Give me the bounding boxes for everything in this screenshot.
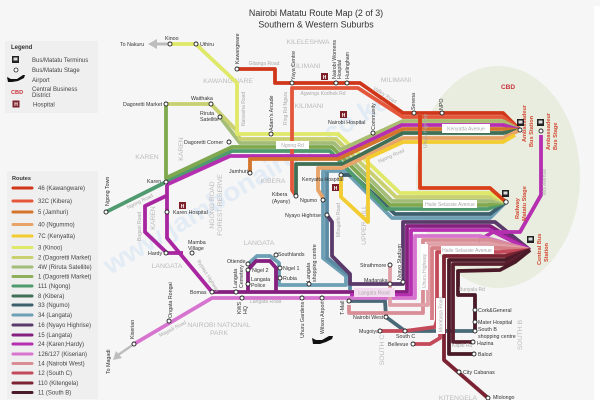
- station labels: Satellite: [200, 117, 219, 123]
- road labels: Valley Road: [372, 86, 398, 105]
- station labels: Ongata Rongai: [168, 282, 174, 318]
- panel: routes key: Routes: [12, 176, 31, 182]
- road labels: Mombasa Road: [438, 296, 444, 332]
- route 33 south: [327, 172, 350, 290]
- road labels: Moi Avenue: [542, 169, 548, 195]
- road labels: Haile Selassie Avenue: [442, 248, 492, 254]
- terminus names: Railway: [515, 197, 521, 219]
- station labels: Balozi: [478, 352, 492, 358]
- station labels: Police: [251, 283, 265, 289]
- station labels: Southlands: [278, 252, 305, 258]
- station labels: Kawangware: [235, 33, 241, 64]
- terminus names: Ambassadeur: [546, 112, 552, 150]
- panel: routes key: 33 (Ngumo): [38, 303, 70, 309]
- station labels: Karen Hospital: [173, 210, 208, 216]
- route Strathmore: [390, 244, 530, 305]
- station labels: Langata: [233, 269, 239, 288]
- station labels: Hardy: [148, 251, 162, 257]
- route 7C: [341, 135, 515, 222]
- terminus names: [515, 104, 559, 265]
- CBD area: [416, 66, 580, 288]
- station labels: shopping centre: [312, 244, 318, 282]
- station labels: Nyayo Highrise: [285, 213, 321, 219]
- station labels: NPO: [439, 99, 445, 110]
- station labels: T-Mall: [340, 301, 346, 315]
- area names: UPPER HILL: [361, 205, 368, 245]
- station labels: Uhuru Gardens: [300, 301, 306, 338]
- panel: routes key: 32C (Kibera): [38, 199, 72, 205]
- route 11 South B: [458, 250, 530, 331]
- panel: legend: Bus/Matatu Stage: [32, 68, 80, 74]
- road labels: Ngong Road: [377, 148, 406, 165]
- station labels: Riruta: [200, 111, 214, 117]
- station labels: Yaya Centre: [291, 51, 297, 80]
- station labels: Community: [371, 103, 377, 130]
- panel: routes key: 8 (Kibera): [38, 294, 64, 300]
- station labels: Hospital: [337, 60, 343, 79]
- panel: legend: CBD: [11, 90, 23, 96]
- panel: legend: [5, 41, 98, 113]
- area names: LANGATA: [152, 263, 183, 270]
- station labels: Hurlingham: [345, 51, 351, 79]
- route 46: [237, 69, 520, 130]
- panel: legend: Central Business: [32, 87, 77, 93]
- route 111: [106, 151, 506, 212]
- route 14 inner: [432, 248, 530, 320]
- hospital icons: H: [334, 186, 338, 192]
- station labels: Serena: [411, 93, 417, 110]
- station labels: South C: [396, 334, 415, 340]
- panel: routes key: 14 (Nairobi West): [38, 362, 85, 368]
- route 1: [166, 104, 506, 205]
- area names: KAREN: [178, 137, 185, 161]
- hospital icons: H: [342, 113, 346, 119]
- station labels: Kenyatta Hospital: [302, 177, 344, 183]
- road labels: Bypass Highway: [195, 259, 220, 294]
- station labels: Waithaka: [191, 96, 213, 102]
- route 15 loop: [248, 261, 276, 291]
- hospital icons: [179, 73, 347, 210]
- station labels: Ngumo: [300, 198, 317, 204]
- station labels: Ngong Town: [105, 177, 111, 206]
- route 110: [444, 250, 530, 398]
- area names: SOUTH B: [517, 319, 524, 350]
- station labels: Madaraka: [364, 278, 388, 284]
- panel: routes key: 34 (Langata): [38, 313, 72, 319]
- station labels: Mater Hospital: [478, 320, 512, 326]
- road labels: Kenyatta Avenue: [447, 126, 485, 132]
- area names: KAWANGWARE: [203, 78, 253, 85]
- station labels: shopping centre: [478, 334, 516, 340]
- route 24 north: [166, 125, 520, 185]
- panel: routes key: 11 (South B): [38, 390, 71, 396]
- road labels: Uhuru Highway: [423, 113, 429, 148]
- panel: legend: Bus/Matatu Terminus: [32, 58, 88, 64]
- terminus names: Central Bus: [537, 234, 543, 265]
- panel: routes key: 111 (Ngong): [38, 284, 70, 290]
- watermark: www.jambonairobi.co.ke: [97, 85, 394, 281]
- road labels: Gitanga Road: [249, 61, 280, 67]
- terminus names: Station: [544, 242, 550, 262]
- panel: routes key: 7C (Kenyatta): [38, 234, 75, 240]
- station labels: Wilson Airport: [320, 301, 326, 334]
- station labels: Rubia: [283, 276, 297, 282]
- station labels: City Cabanas: [463, 370, 495, 376]
- panel: routes key: 1 (Dagoretti Market): [38, 274, 91, 280]
- road labels: Haile Selassie Avenue: [425, 202, 475, 208]
- station labels: Nigel 2: [252, 268, 269, 274]
- station labels: Village: [188, 246, 204, 252]
- station labels: [105, 33, 516, 400]
- area names: MILIMANI: [381, 77, 411, 84]
- area names: SOUTH C: [379, 335, 386, 365]
- title: Nairobi Matatu Route Map (2 of 3): [249, 8, 383, 18]
- station labels: Bellevue: [388, 342, 408, 348]
- station labels: Adam's Arcade: [269, 95, 275, 131]
- route 24: [478, 135, 541, 241]
- area names: NGONG ROAD: [209, 181, 216, 229]
- station labels: Otiende: [227, 259, 246, 265]
- station labels: Dagoretti Market: [123, 102, 163, 108]
- panel: routes key: 24 (Karen;Hardy): [38, 342, 84, 348]
- road labels: Ring Rd Ngara: [283, 92, 289, 125]
- route 3: [170, 44, 506, 202]
- route 126: [134, 236, 530, 344]
- road labels: Langata Road: [250, 299, 282, 305]
- panel: routes key: 126/127 (Kiserian): [38, 352, 87, 358]
- area names: KILELESHWA: [286, 39, 330, 46]
- hospital icons: H: [181, 204, 185, 210]
- route 15: [212, 226, 530, 292]
- route 24 bundle: [350, 230, 530, 295]
- panel: routes key: 12 (South C): [38, 371, 72, 377]
- title: Southern & Western Suburbs: [258, 20, 374, 30]
- area names: KILIMANI: [291, 63, 321, 70]
- station labels: Hazina: [477, 341, 494, 347]
- route 11 Hazina: [453, 250, 530, 342]
- panel: routes key: 46 (Kawangware): [38, 186, 85, 192]
- panel: routes key: [7, 171, 98, 399]
- area names: KAREN: [135, 154, 159, 161]
- road labels: Agwings Kodhek Rd: [300, 91, 346, 97]
- panel: legend: Legend: [11, 45, 33, 51]
- route 34 loop: [248, 256, 279, 264]
- panel: routes key: 2 (Dagoretti Market): [38, 256, 91, 262]
- road labels: Langata Road: [358, 290, 390, 296]
- area names: FOREST RESERVE: [217, 174, 224, 236]
- station labels: Dagoretti Corner: [184, 140, 223, 146]
- route 4W: [220, 117, 506, 202]
- station labels: Nairobi Hospital: [328, 120, 365, 126]
- route 33: [341, 175, 506, 214]
- panel: routes key: 40 (Ngummo): [38, 222, 75, 228]
- road labels: Uhuru Highway: [422, 253, 428, 288]
- panel: routes key: 4W (Riruta Satellite): [38, 265, 92, 271]
- station labels: Karen: [147, 179, 161, 185]
- station labels: (Ayany): [272, 199, 290, 205]
- station labels: South B: [478, 327, 497, 333]
- panel: legend: H: [14, 102, 18, 108]
- area names: KAREN: [150, 206, 157, 230]
- route 12 Mugoiya: [380, 329, 405, 333]
- panel: routes key: 15 (Langata): [38, 333, 72, 339]
- route 8: [296, 130, 520, 196]
- station labels: Cork&General: [478, 308, 512, 314]
- route 24 Hardy: [145, 196, 183, 253]
- area names: LANGATA: [244, 240, 275, 247]
- panel: routes key: 110 (Kitengela): [38, 381, 78, 387]
- route olive: [340, 121, 520, 150]
- station labels: KWS: [237, 301, 243, 314]
- road labels: Kapiti Rd: [452, 343, 473, 349]
- terminus icons: [502, 119, 544, 243]
- route 12: [405, 250, 530, 331]
- panel: routes key: 5 (Jamhuri): [38, 210, 68, 216]
- terminus names: Matatu Stage: [522, 186, 528, 221]
- station labels: Uthiru: [200, 42, 214, 48]
- road labels: [126, 61, 548, 349]
- panel: legend: Hospital: [33, 102, 55, 108]
- station labels: HQ: [243, 306, 249, 314]
- route 2: [166, 104, 506, 202]
- station labels: Jamhuri: [229, 169, 248, 175]
- station labels: To Nakuru: [120, 42, 144, 48]
- station labels: Langata: [306, 263, 312, 282]
- route 5: [250, 129, 520, 173]
- CBD label: CBD: [501, 84, 515, 91]
- station labels: Bomas: [190, 290, 207, 296]
- route 11 Balozi: [449, 250, 530, 354]
- terminus names: Bus Station: [529, 115, 535, 147]
- road labels: Bunyala Rd: [459, 287, 485, 293]
- route 16: [327, 215, 530, 284]
- station labels: To Magadi: [106, 350, 112, 374]
- area names: [135, 39, 524, 400]
- route 33 T-Mall: [349, 301, 475, 331]
- hospital icons: H: [323, 75, 327, 81]
- area names: NAIROBI NATIONAL: [187, 322, 251, 329]
- panel: legend: Airport: [32, 78, 50, 84]
- station labels: Strathmore: [360, 263, 386, 269]
- route 24 south: [167, 185, 212, 292]
- station labels: Langata: [251, 277, 270, 283]
- route 32 Uhuru: [420, 115, 506, 202]
- route 32C: [292, 88, 520, 196]
- road labels: Ngong Road: [126, 193, 154, 211]
- road labels: Naivasha Road: [241, 92, 247, 126]
- road labels: Mbagathi Road: [336, 203, 342, 237]
- station labels: Kiserian: [130, 320, 136, 339]
- icon: airport plane: [312, 336, 333, 344]
- station labels: Cemetery: [239, 265, 245, 288]
- station labels: Kinoo: [165, 36, 179, 42]
- station labels: Nairobi West: [353, 315, 384, 321]
- road labels: Ngong Rd: [281, 143, 304, 149]
- panel: legend: District: [32, 93, 51, 99]
- station labels: Mamba: [188, 240, 206, 246]
- route 12 Bellevue: [413, 320, 440, 344]
- station labels: Mugoiya: [359, 329, 379, 335]
- area names: PARK: [210, 330, 228, 337]
- station labels: Nairobi Womens: [332, 40, 338, 79]
- station labels: Nyayo Stadium: [397, 243, 403, 280]
- Nyayo Stadium label strip: [396, 248, 402, 281]
- terminus names: Bus Stage: [553, 123, 559, 150]
- road labels: Bogani Road: [137, 212, 143, 241]
- area names: KILIMANI: [294, 103, 324, 110]
- station stops: [104, 42, 543, 400]
- panel: routes key: 16 (Nyayo Highrise): [38, 323, 91, 329]
- route 14: [349, 240, 530, 313]
- route 40: [318, 130, 520, 198]
- station labels: Kibera: [272, 192, 287, 198]
- panel: routes key: 3 (Kinoo): [38, 246, 62, 252]
- title: [249, 8, 383, 30]
- route lines: [106, 44, 541, 398]
- station labels: Nigel 1: [283, 266, 300, 272]
- area names: KIBERA: [261, 178, 286, 185]
- road labels: Magadi Road: [158, 320, 188, 339]
- to-Nakuru and to-Magadi arrows: [113, 39, 170, 360]
- terminus names: Ambassadeur: [522, 104, 528, 142]
- route 34 main: [279, 171, 506, 285]
